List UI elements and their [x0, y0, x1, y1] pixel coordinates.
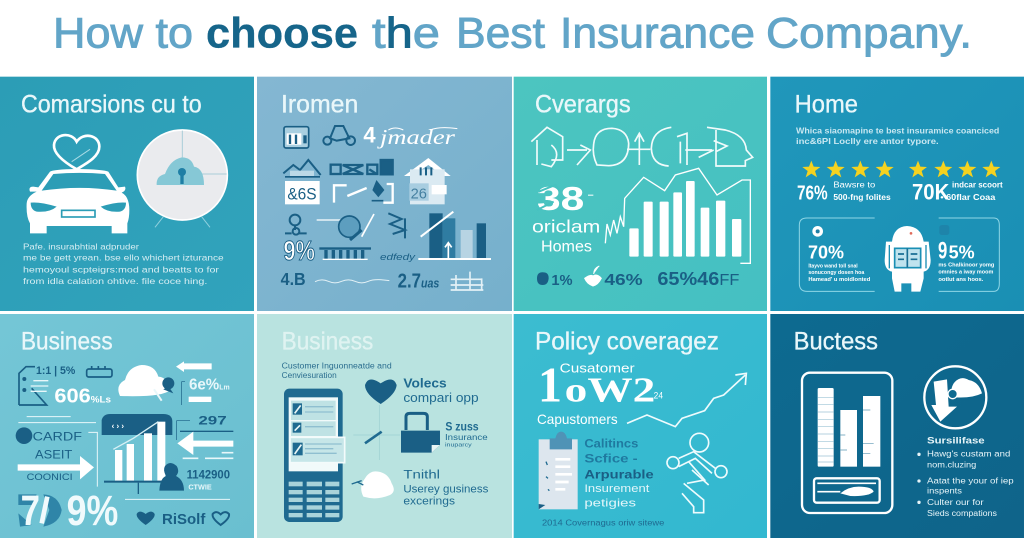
text block: califincs: Insurement — [584, 483, 649, 495]
icon: line figures — [531, 127, 753, 167]
stat: low customer: 1 — [538, 357, 562, 413]
panel: coverage — [514, 77, 1024, 311]
label: trithl: excerings — [403, 496, 455, 508]
label: trithl: Userey gusiness — [403, 483, 489, 495]
title: Insurance — [560, 10, 755, 58]
stat: 76 percent: Bawsre to — [833, 181, 876, 190]
panel: business right — [257, 314, 512, 538]
card: 70 percent: Itayvo wand toll snal — [808, 263, 858, 269]
text block: comparisons: hemoyoul scpteigrs:mod and beatts to for — [23, 264, 219, 274]
panel: iromen — [257, 77, 512, 311]
heading: comparisons: Comarsions cu to — [21, 91, 202, 118]
stat: 76 percent: 500-fng folites — [833, 193, 891, 202]
panel: buctess — [770, 314, 1024, 538]
stats: bottom row: 1% — [551, 273, 573, 289]
label: trithl — [403, 467, 489, 508]
label: 4 jmader — [363, 122, 457, 149]
heading: policy coverage: Policy coveragez — [535, 328, 719, 355]
labels: carde asset coonici: ASEIT — [35, 447, 73, 461]
label: volecs — [403, 375, 479, 405]
icon: document with stats: 1:1 | 5% — [36, 365, 76, 377]
text block: home — [796, 125, 999, 146]
card: 70 percent: sonucongy dosen hoa — [808, 270, 864, 276]
label: ecsr — [331, 160, 393, 174]
stats: bottom row: 46% — [604, 272, 643, 289]
label: edfedy: edfedy — [380, 252, 416, 262]
card: 95 percent: ms Chalkinoor yomg — [938, 263, 994, 269]
lines left — [18, 417, 97, 487]
card: 70 percent: Hamead' u moidlonted — [808, 277, 870, 283]
stat: 70 percent — [912, 179, 1003, 204]
icon: chart card — [802, 373, 892, 513]
icon: heart — [365, 380, 397, 404]
title: Best — [456, 10, 545, 58]
label: 4 jmader: jmader — [376, 125, 456, 149]
icon: robot — [885, 226, 931, 292]
arrow line — [125, 498, 230, 501]
text block: home: inc&6PI Loclly ere antor typore. — [796, 136, 939, 146]
title: How to — [53, 10, 193, 58]
heading: home: Home — [795, 91, 858, 118]
icon: heart — [54, 135, 99, 169]
icon: heart filled — [137, 512, 155, 525]
stat: 1142900: CTWIE — [188, 482, 212, 491]
card: 95 percent: 5% — [949, 241, 975, 262]
text block: comparisons: Pafe. insurabhtial adpruder — [23, 241, 139, 251]
chart: presentation bars — [102, 414, 172, 494]
panel: policy coverage — [514, 314, 1024, 538]
label: 38: 38 — [537, 181, 584, 218]
text block: comparisons — [23, 241, 224, 286]
text block: buctess list: nom.cluzing — [927, 460, 976, 469]
heading: buctess: Buctess — [794, 328, 878, 355]
icon: stars — [802, 161, 1000, 177]
label: 38 — [537, 181, 593, 218]
stat: 297 — [177, 413, 233, 440]
big stat: 709 percent: 7 — [21, 487, 40, 535]
heading: business right: Business — [282, 328, 373, 355]
icon: person — [159, 463, 184, 491]
label: s zuss: S zuss — [445, 420, 479, 434]
arrow: right — [18, 456, 94, 479]
title: Company. — [766, 10, 972, 58]
stat: 2.7: 2.7uas — [398, 270, 439, 292]
wave line — [315, 280, 389, 283]
text block: home: Whica siaomapine te best insuramice coanciced — [796, 125, 999, 135]
icon: white card: &6S — [287, 184, 317, 203]
label: volecs: compari opp — [403, 391, 479, 405]
icon: cloud — [118, 365, 174, 401]
stat: 70 percent: indcar scoort — [952, 181, 1003, 190]
icon: clipboard — [539, 432, 578, 509]
labels: carde asset coonici: COONICI — [27, 472, 73, 482]
heading: business left: Business — [21, 328, 113, 355]
chart: presentation bars: ‹ › › — [112, 421, 124, 430]
icon: white house: 26 — [411, 186, 427, 202]
icon: lock document — [401, 413, 440, 453]
stat: low customer — [538, 357, 663, 413]
icon: arrow shield — [317, 214, 374, 240]
label: oriclam homes: oriclam — [532, 217, 600, 237]
icon: bench — [451, 272, 483, 291]
text block: business right — [282, 361, 392, 380]
label: capustomers: Capustomers — [537, 411, 618, 427]
stat: 76 percent: 76% — [797, 181, 828, 204]
stat: 606: 606%Ls — [54, 384, 111, 407]
icon: circle map — [924, 366, 986, 428]
chart: growth arrow line — [627, 373, 746, 427]
lines right — [183, 453, 233, 458]
label: volecs: Volecs — [403, 375, 447, 390]
stat: 60 percent: 6e%Lm — [189, 376, 230, 393]
text block: buctess list: Hawg's custam and — [927, 450, 1010, 459]
icon: tractor — [323, 126, 355, 145]
heading: iromen: Iromen — [281, 91, 358, 118]
card: 70 percent: 70% — [808, 241, 844, 262]
stat: 60 percent — [182, 376, 230, 405]
arrow: left — [177, 432, 233, 455]
icon: heart outline — [213, 512, 229, 525]
stats: bottom row — [537, 266, 739, 289]
label: risoff: RiSolf — [162, 512, 205, 528]
text block: buctess list: inspents — [927, 487, 962, 496]
icon: running figure — [667, 433, 727, 513]
panel: business left — [0, 314, 512, 538]
stat: low customer: 24 — [654, 391, 663, 401]
big stat: 709 percent: 9% — [67, 487, 118, 535]
stat: 1142900 — [187, 467, 230, 491]
icon: table rail — [319, 247, 371, 260]
card: 95 percent: omnies a iway moom — [938, 269, 994, 275]
card: 95 percent — [938, 218, 999, 291]
stat: low customer: oW2 — [565, 372, 655, 410]
text block: comparisons: from idla calation ohtive. file coce hing. — [23, 276, 207, 286]
text block: buctess list: Culter our for — [927, 498, 984, 507]
text block: buctess list: Sursilifase — [927, 435, 985, 445]
panel: comparisons — [0, 77, 512, 311]
label: oriclam homes — [532, 217, 600, 256]
panel: home — [770, 77, 1024, 311]
label: s zuss — [445, 420, 488, 449]
icon: document with stats — [19, 365, 112, 405]
stat: 76 percent — [797, 181, 891, 204]
stat: 4.b: 4.B — [281, 269, 306, 289]
labels: carde asset coonici — [16, 427, 82, 482]
icon: person network — [285, 215, 307, 235]
text block: califincs — [584, 436, 654, 510]
card: 70 percent — [799, 218, 875, 291]
stat: 70 percent: 70K — [912, 179, 949, 204]
stat: 1142900: 1142900 — [187, 467, 230, 481]
big stat: 709 percent — [18, 487, 118, 535]
connector cross with pen — [353, 405, 400, 460]
label: s zuss: Insurance — [445, 432, 488, 442]
heading: coverage: Cverargs — [535, 91, 631, 118]
icon: squiggle — [388, 213, 405, 238]
label: trithl: Tnithl — [403, 467, 440, 481]
icon: small house — [283, 160, 321, 178]
icon: phone — [284, 389, 345, 522]
text block: business right: Customer Inguonneatde and — [282, 361, 392, 370]
text block: business right: Cenviesuration — [282, 371, 337, 380]
label: s zuss: inuparcy — [445, 443, 472, 449]
icon: device box — [284, 127, 309, 148]
card: 95 percent: ootlut ans hoos. — [938, 277, 984, 283]
label: oriclam homes: Homes — [541, 239, 592, 256]
title: the — [372, 10, 440, 58]
card: 95 percent: 9 — [938, 237, 947, 264]
chart: buildings — [418, 212, 491, 260]
arrow: top right — [176, 361, 212, 372]
title: choose — [206, 10, 358, 58]
stat: low customer: Cusatomer — [560, 362, 635, 376]
label: percent: 9% — [283, 235, 315, 266]
chart: bar chart with line — [605, 168, 750, 263]
text block: buctess list: Aatat the your of iep — [927, 477, 1014, 486]
footnote: 2014 Covernagus oriw sitewe — [542, 517, 665, 527]
text block: buctess list: Sieds compations — [927, 509, 997, 518]
stat: 297: 297 — [198, 413, 227, 427]
label: 4 jmader: 4 — [363, 122, 376, 147]
icon: white cloud — [352, 471, 394, 498]
icon: trophy bracket — [334, 182, 393, 203]
stats: bottom row: 65%46FF — [657, 268, 739, 289]
icon: white house — [404, 158, 451, 204]
labels: carde asset coonici: CARDF — [33, 429, 82, 443]
text block: comparisons: me be gett yrean. bse ello whichert izturance — [23, 253, 224, 263]
title — [53, 10, 972, 58]
icon: cloud lock globe — [137, 130, 227, 227]
stat: 70 percent: • 60flar Coaa — [940, 193, 996, 202]
text block: buctess list — [917, 435, 1014, 518]
icon: car — [27, 169, 129, 233]
text block: califincs: Arpurable — [584, 467, 654, 481]
text block: califincs: petigies — [584, 498, 636, 510]
text block: califincs: Scfice - — [584, 452, 638, 466]
text block: califincs: Calitincs — [584, 436, 639, 450]
